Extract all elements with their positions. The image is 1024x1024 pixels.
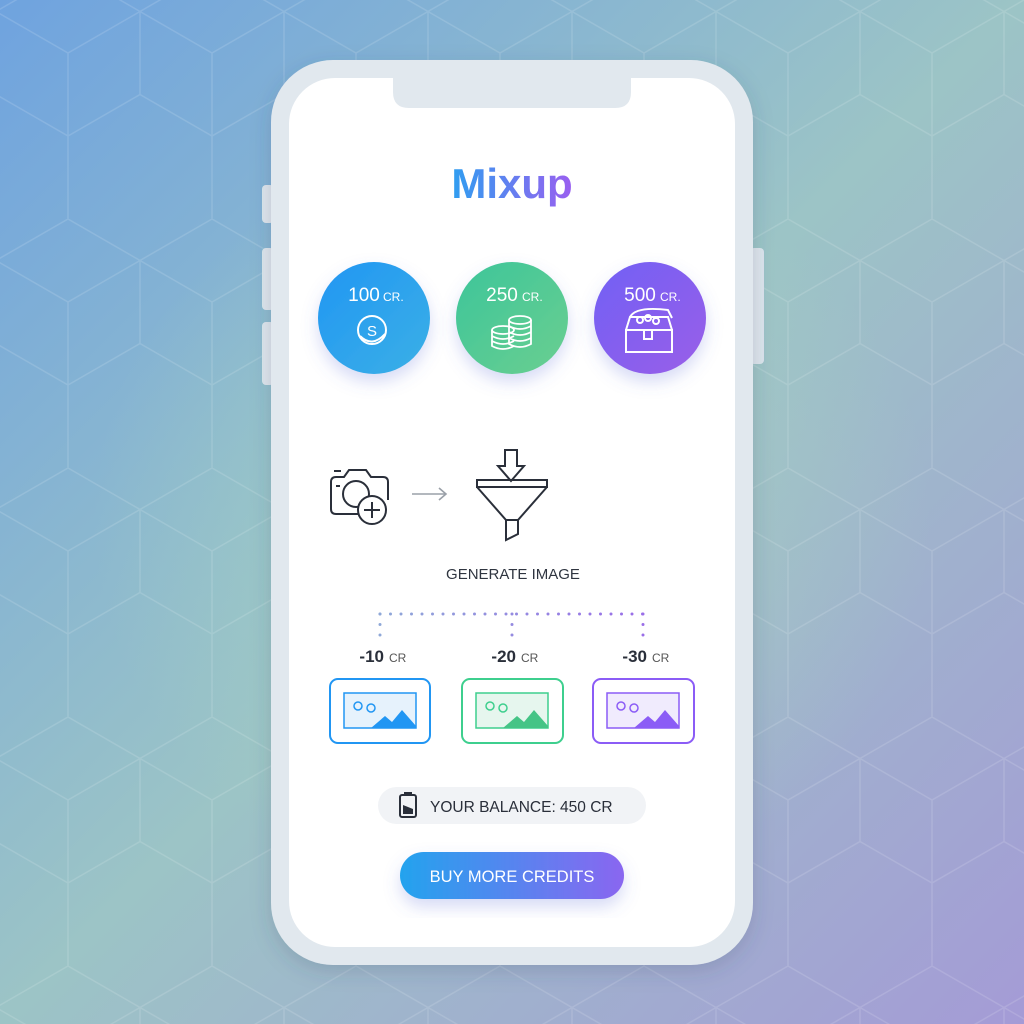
cost -30: -30 xyxy=(622,647,647,666)
icon: funnel xyxy=(477,450,547,540)
phone xyxy=(262,60,764,965)
cost -20 xyxy=(462,647,563,743)
process: upload to generate xyxy=(331,450,580,583)
cost -10 xyxy=(330,647,430,743)
pack 250: CR. xyxy=(522,290,543,304)
label: GENERATE IMAGE xyxy=(446,566,580,583)
pack 250 xyxy=(456,262,568,374)
credit packs xyxy=(318,262,706,374)
cost -30: CR xyxy=(652,651,670,665)
dotted connector xyxy=(380,614,643,636)
balance pill: YOUR BALANCE: 450 CR xyxy=(430,799,613,816)
pack 100: CR. xyxy=(383,290,404,304)
pack 500: 500 xyxy=(624,285,656,306)
buy button: BUY MORE CREDITS xyxy=(430,868,594,886)
pack 500: CR. xyxy=(660,290,681,304)
icon: camera plus xyxy=(331,470,388,524)
cost -20: -20 xyxy=(491,647,516,666)
pack 250: 250 xyxy=(486,285,518,306)
generation costs xyxy=(330,647,694,743)
cost -10: CR xyxy=(389,651,407,665)
icon: battery xyxy=(400,792,416,817)
pack 100: S xyxy=(367,323,377,340)
buy button xyxy=(400,852,624,899)
pack 100 xyxy=(318,262,430,374)
pack 100: 100 xyxy=(348,285,380,306)
side buttons xyxy=(262,185,764,385)
cost -20: CR xyxy=(521,651,539,665)
balance pill xyxy=(378,787,646,824)
cost -10: -10 xyxy=(359,647,384,666)
notch xyxy=(393,78,631,108)
arrow xyxy=(412,488,446,500)
pack 500 xyxy=(594,262,706,374)
cost -30 xyxy=(593,647,694,743)
title: Mixup xyxy=(451,160,573,207)
